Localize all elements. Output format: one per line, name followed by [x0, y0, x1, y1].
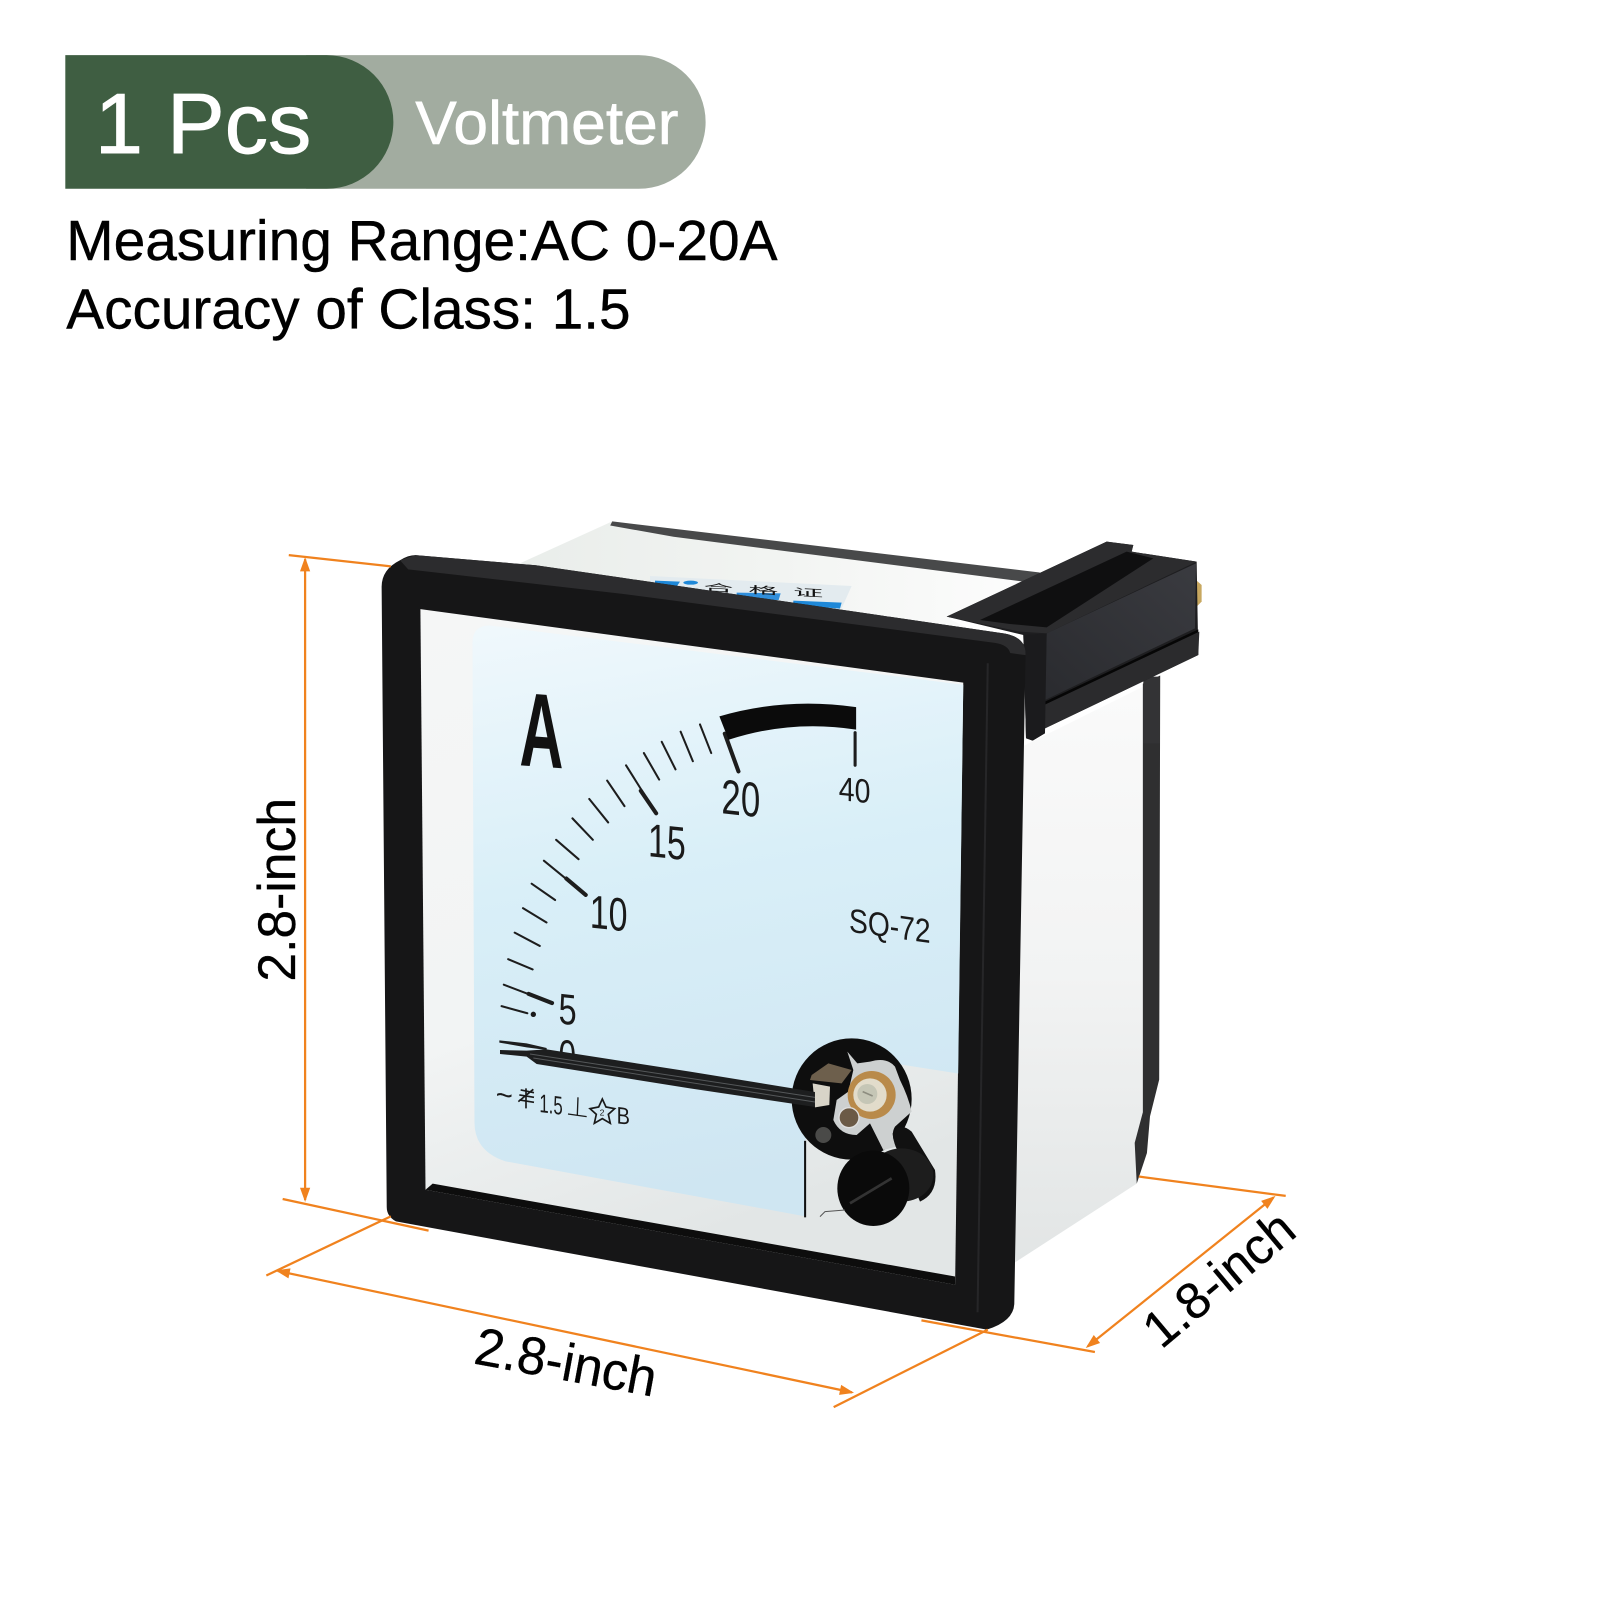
dimension: height 2.8-inch: [248, 555, 429, 1231]
scale dot: [531, 1012, 536, 1017]
knob cap: [837, 1148, 933, 1226]
depth label: 1.8-inch: [1132, 1199, 1306, 1358]
pointer needle: [499, 1040, 815, 1107]
extension lines and arrow: [921, 1177, 1286, 1352]
class letter B: B: [617, 1102, 630, 1131]
meter face panel: [420, 609, 963, 1285]
number 20: 20: [721, 770, 760, 828]
badge quantity text: 1 Pcs: [95, 76, 311, 172]
accuracy class: Accuracy of Class: 1.5: [66, 278, 631, 341]
terminal connector: [947, 542, 1202, 743]
extension lines and arrow: [266, 1216, 988, 1407]
mechanism black disc: [792, 1038, 912, 1160]
blue dial plate: [472, 626, 963, 1216]
height label: 2.8-inch: [248, 798, 307, 982]
number 5: 5: [559, 985, 577, 1035]
brass washer: [848, 1071, 896, 1119]
infographic canvas: [65, 55, 1296, 1408]
dimension: depth 1.8-inch: [921, 1177, 1306, 1358]
dial cut-out edge line: [804, 1141, 806, 1217]
silver plate: [833, 1052, 912, 1150]
badge light segment: [306, 55, 706, 189]
frame inner lip: [426, 1184, 955, 1285]
certificate sticker: [650, 576, 852, 609]
accuracy class mark: 1.5: [539, 1088, 563, 1121]
adjust screw: [857, 1084, 877, 1104]
product: panel meter: [382, 521, 1202, 1330]
star mark: [590, 1099, 615, 1123]
number 0: 0: [559, 1031, 576, 1081]
specification text: [66, 209, 778, 341]
tilde symbol: ~: [496, 1081, 513, 1110]
meter right side: [1015, 676, 1160, 1262]
dimension: width 2.8-inch: [266, 1216, 988, 1409]
lower dial markings: 2: [600, 1107, 605, 1117]
dial unit letter A: A: [519, 671, 563, 792]
scale numbers: [590, 770, 931, 951]
dial over-range arc: [719, 704, 856, 740]
number 15: 15: [648, 813, 686, 870]
extension lines and arrow: [283, 555, 429, 1231]
hair wire: [820, 1210, 845, 1217]
moving-iron symbol: [518, 1088, 534, 1108]
brown bracket: [810, 1063, 852, 1083]
width label: 2.8-inch: [470, 1317, 662, 1409]
dial scale ticks: [502, 724, 855, 1013]
zero-adjust mechanism: [820, 1052, 935, 1226]
badge dark segment: [65, 55, 393, 189]
badge: 1 Pcs Voltmeter: [65, 55, 706, 189]
lower dial markings: [496, 985, 630, 1131]
meter top surface: [513, 521, 1040, 653]
meter front frame: [382, 555, 1026, 1330]
number 10: 10: [590, 885, 628, 941]
rivet: [815, 1127, 831, 1143]
plate hole: [839, 1108, 859, 1128]
measuring range: Measuring Range:AC 0-20A: [66, 209, 778, 272]
black arm: [893, 1127, 935, 1202]
certificate sticker: 合格证: [703, 582, 838, 600]
badge product text: Voltmeter: [415, 89, 679, 157]
number 40: 40: [839, 770, 870, 811]
model number: SQ-72: [849, 902, 931, 951]
ground symbol: [568, 1097, 587, 1117]
